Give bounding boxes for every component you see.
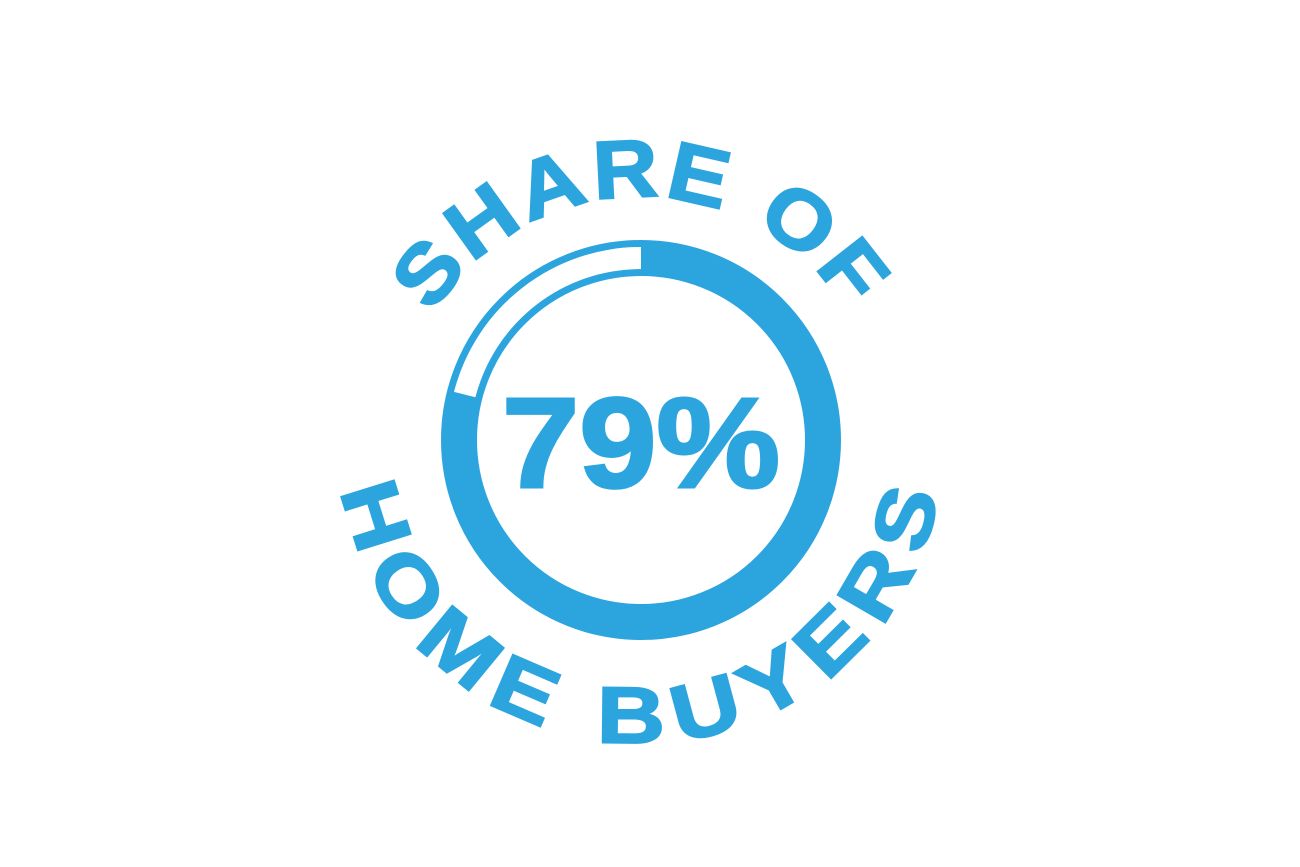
unfilled segment 21% bbox=[454, 247, 641, 397]
donut chart: 79% bbox=[454, 247, 823, 622]
center value: 79% bbox=[502, 372, 780, 515]
title bottom: HOME BUYERS: HOME BUYERS bbox=[340, 479, 936, 744]
title top: SHARE OF: SHARE OF bbox=[396, 140, 892, 306]
